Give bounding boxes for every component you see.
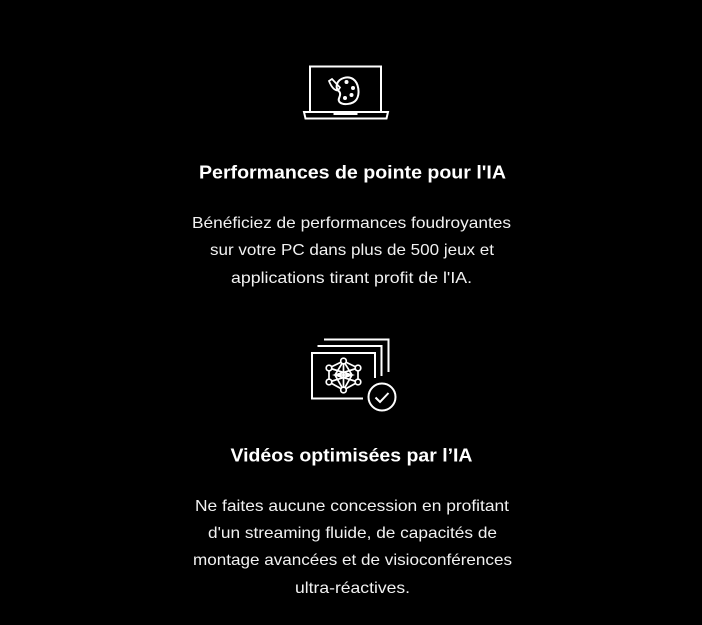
panel: AI video [193, 340, 512, 597]
text block: video description: Ne faites aucune concession en profitant [195, 498, 510, 515]
icon: laptop with palette [304, 66, 388, 118]
text block: performance description: applications tirant profit de l'IA. [231, 270, 472, 287]
heading: video: Vidéos optimisées par l’IA [230, 444, 472, 466]
text block: video description: montage avancées et de visioconférences [193, 552, 512, 569]
text block: performance description [192, 215, 511, 287]
text block: video description: ultra-réactives. [295, 580, 410, 597]
text block: performance description: Bénéficiez de performances foudroyantes [192, 215, 511, 232]
heading: performance: Performances de pointe pour l'IA [199, 162, 506, 182]
text block: video description: d'un streaming fluide, de capacités de [208, 525, 497, 542]
text block: performance description: sur votre PC dans plus de 500 jeux et [210, 242, 495, 259]
text block: video description [193, 498, 512, 597]
icon: stacked frames with neural network and check badge [312, 340, 396, 410]
panel: AI performance [192, 66, 511, 287]
